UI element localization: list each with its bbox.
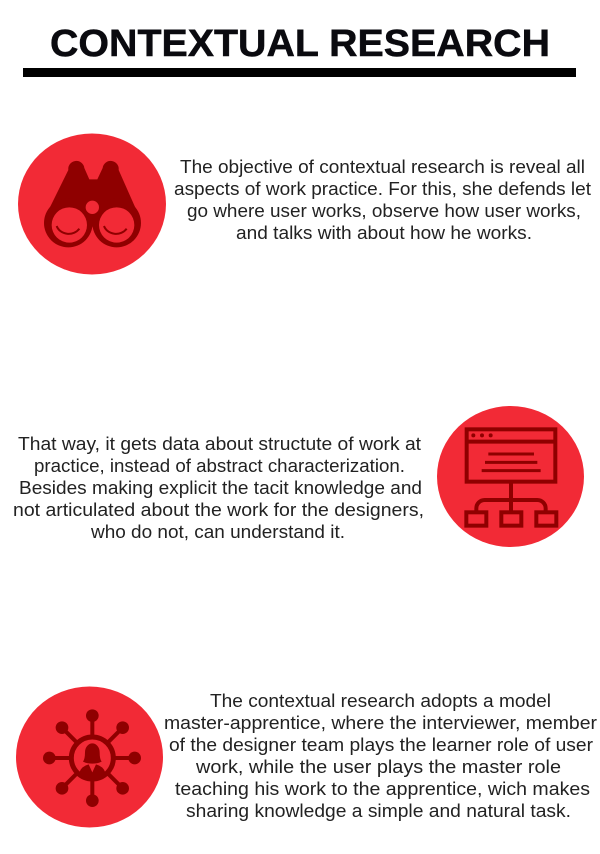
title: CONTEXTUAL RESEARCH bbox=[50, 23, 550, 65]
text block: objective: and talks with about how he works. bbox=[236, 222, 532, 243]
text block: master-apprentice: master-apprentice, where the interviewer, member bbox=[164, 712, 597, 733]
text block: master-apprentice: teaching his work to the apprentice, wich makes bbox=[175, 778, 590, 799]
text block: master-apprentice: of the designer team plays the learner role of user bbox=[169, 734, 593, 755]
text block: structure of work: That way, it gets data about structute of work at bbox=[18, 433, 421, 454]
icon: binoculars bbox=[18, 134, 166, 274]
title underline bar bbox=[23, 68, 576, 77]
text block: structure of work: Besides making explicit the tacit knowledge and bbox=[19, 477, 422, 498]
icon: network with person bbox=[16, 686, 163, 828]
text block: structure of work bbox=[13, 433, 424, 542]
icon: website hierarchy bbox=[437, 406, 584, 547]
text block: master-apprentice bbox=[164, 690, 597, 821]
text block: objective: go where user works, observe how user works, bbox=[187, 200, 581, 221]
text block: objective bbox=[174, 156, 591, 243]
panel: master-apprentice bbox=[16, 686, 597, 828]
text block: master-apprentice: The contextual research adopts a model bbox=[210, 690, 551, 711]
text block: master-apprentice: sharing knowledge a simple and natural task. bbox=[186, 800, 571, 821]
text block: objective: aspects of work practice. For this, she defends let bbox=[174, 178, 591, 199]
text block: objective: The objective of contextual research is reveal all bbox=[180, 156, 585, 177]
panel: structure of work bbox=[13, 406, 584, 547]
text block: structure of work: who do not, can understand it. bbox=[90, 521, 345, 542]
text block: master-apprentice: work, while the user plays the master role bbox=[195, 756, 561, 777]
text block: structure of work: not articulated about the work for the designers, bbox=[13, 499, 424, 520]
text block: structure of work: practice, instead of abstract characterization. bbox=[34, 455, 405, 476]
panel: objective bbox=[18, 134, 591, 274]
